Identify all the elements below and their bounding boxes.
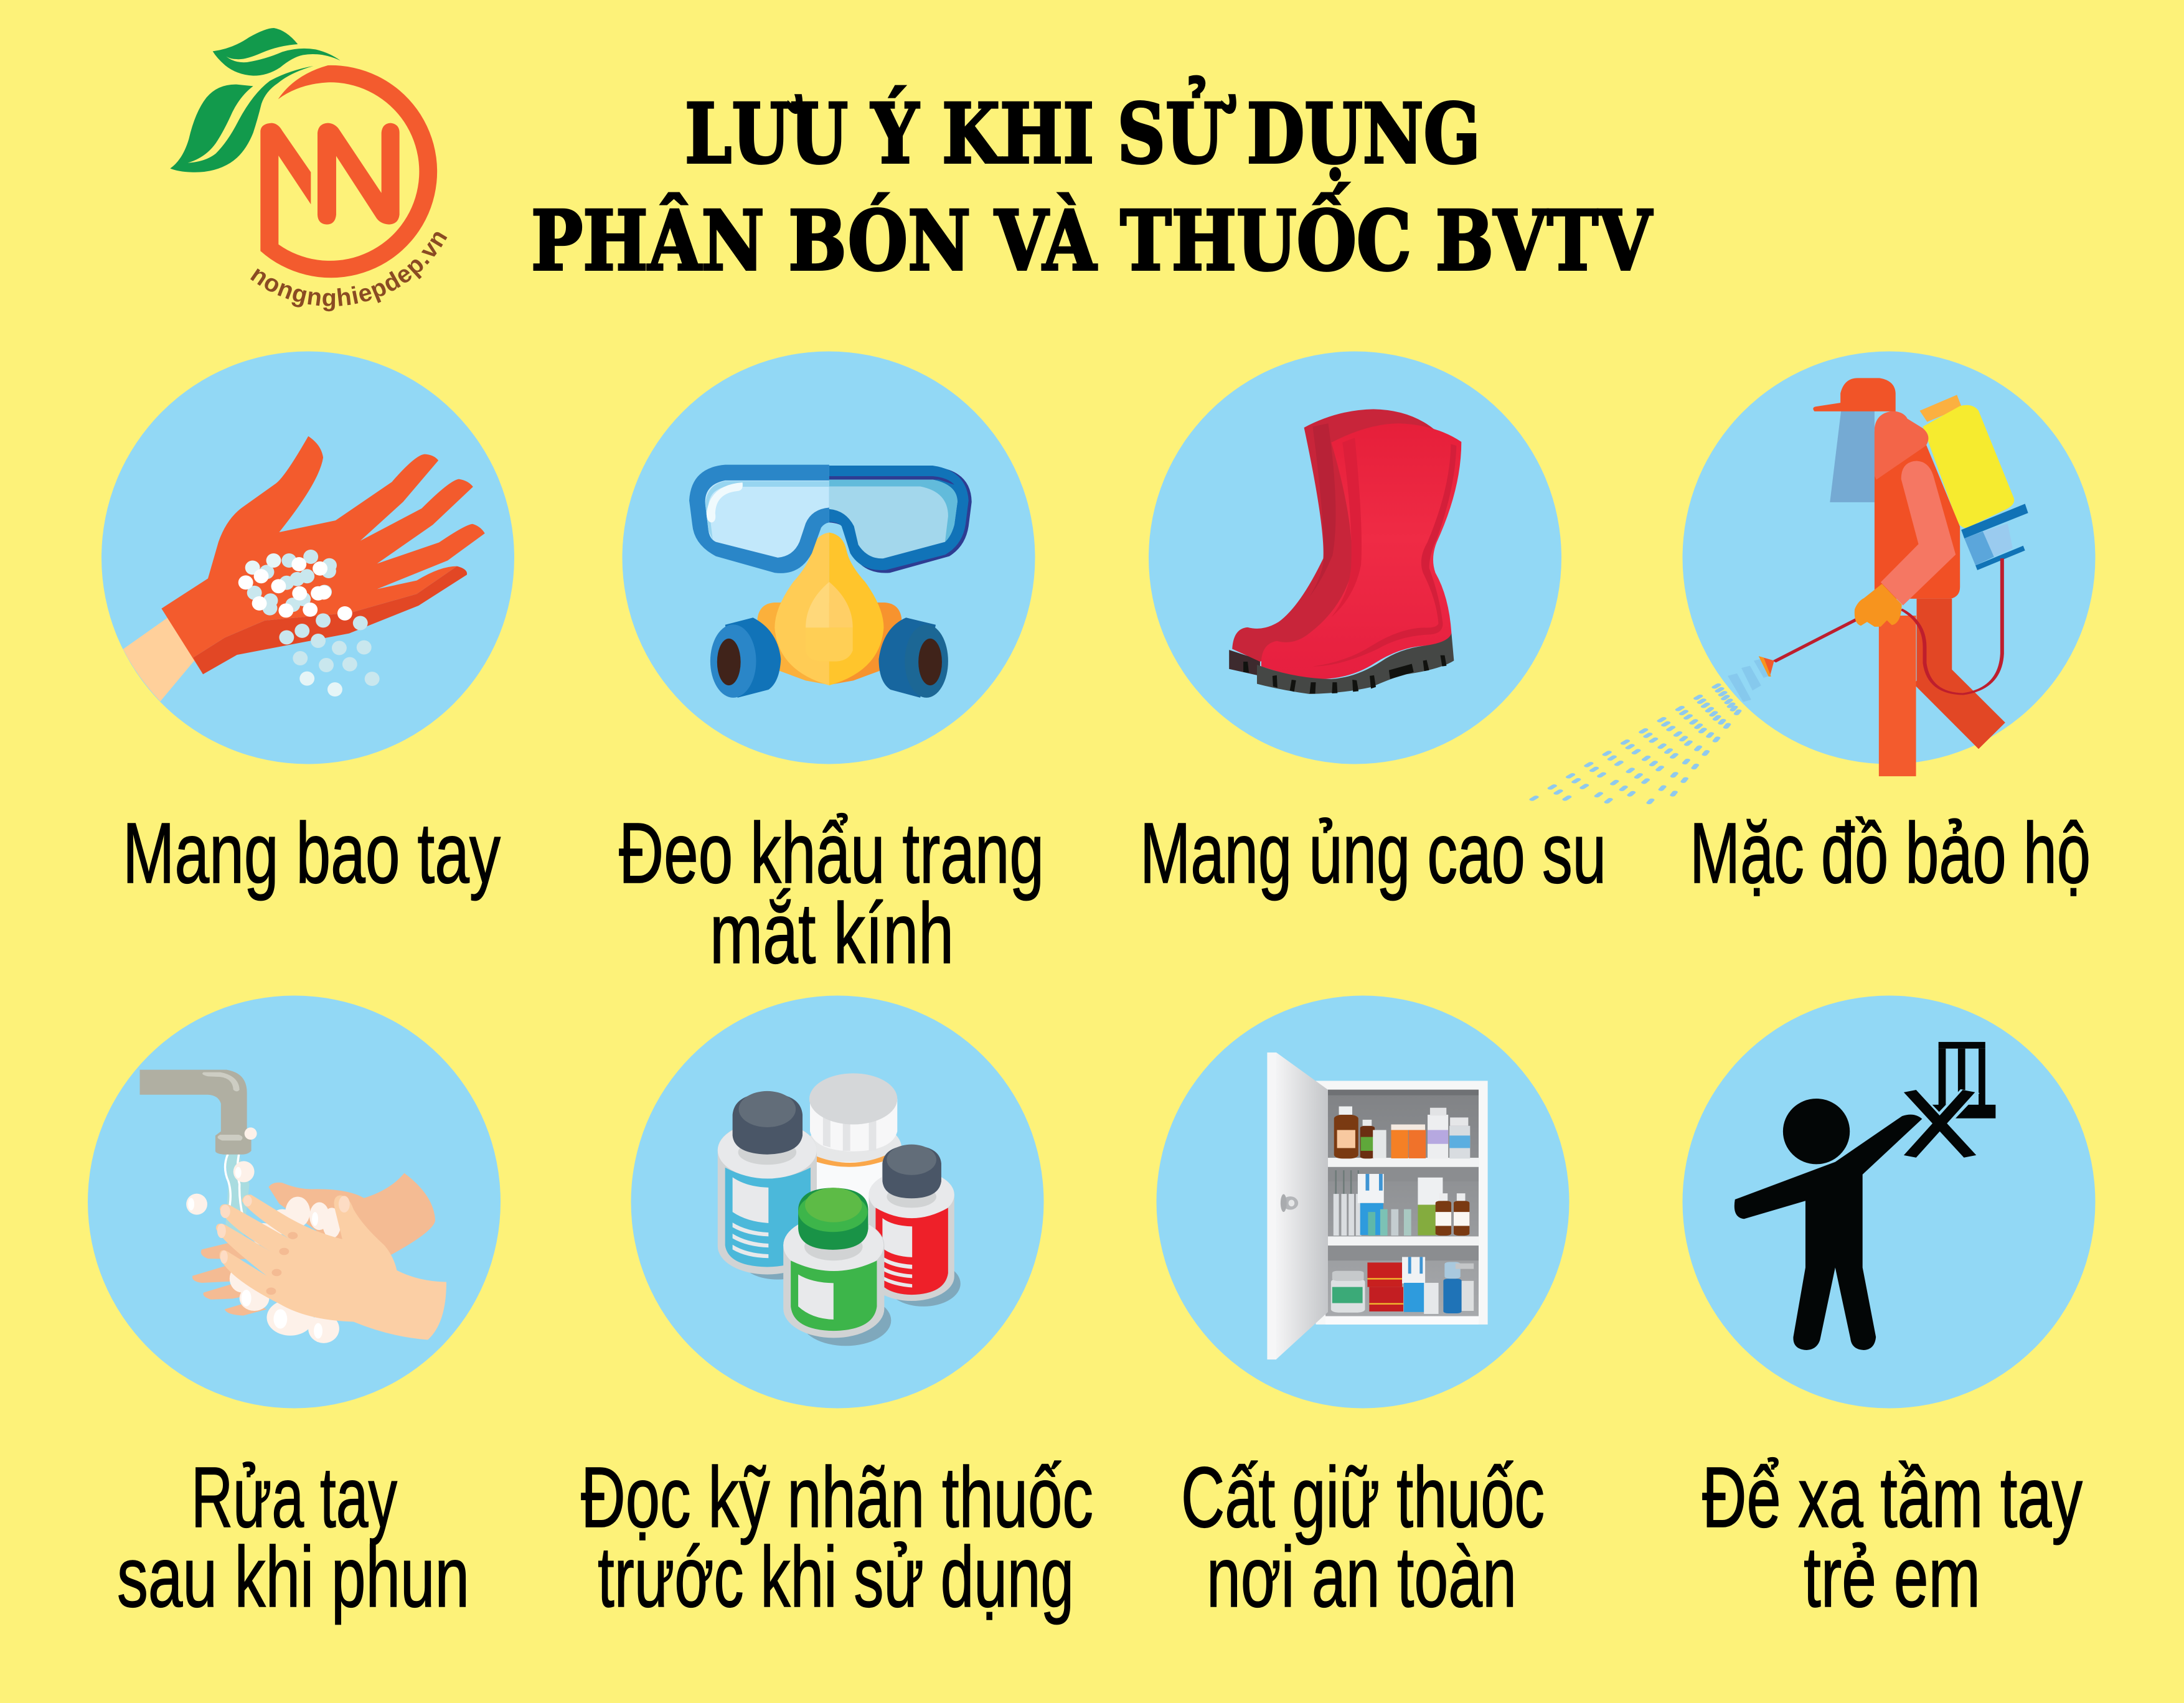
cabinet symbol (1931, 1042, 1995, 1119)
circle (1149, 351, 1561, 764)
circle (631, 996, 1043, 1408)
panel: protective clothing (1527, 351, 2096, 901)
circle (623, 351, 1035, 764)
label: trước khi sử dụng (598, 1529, 1074, 1625)
label: mắt kính (710, 886, 954, 982)
label (619, 805, 1044, 982)
panel: wash hands (88, 996, 501, 1625)
label: trẻ em (1804, 1529, 1980, 1625)
cross mark (1910, 1091, 1970, 1156)
panel: safe storage (1157, 996, 1569, 1625)
logo text: nongnghiepdep.vn (250, 232, 447, 311)
panel: read labels (581, 996, 1093, 1625)
child figure (1734, 1099, 1922, 1350)
label (581, 1450, 1093, 1625)
label: sau khi phun (117, 1529, 469, 1625)
red bottle (869, 1145, 954, 1301)
icon: washing hands under tap (140, 1070, 446, 1343)
icon: sprayer worker (1527, 378, 2028, 804)
icon: glove hand with granules (123, 436, 485, 701)
panel: boots (1140, 351, 1606, 901)
panel: gloves (101, 351, 514, 901)
title: PHÂN BÓN VÀ THUỐC BVTV (531, 182, 1653, 289)
title (531, 75, 1653, 289)
label: nơi an toàn (1207, 1529, 1517, 1625)
icon: rubber boot (1229, 409, 1461, 694)
label: Mang bao tay (123, 805, 501, 901)
panel: keep away from children (1682, 996, 2096, 1625)
logo (170, 28, 447, 311)
icon: respirator and goggles (689, 465, 972, 698)
label: Mang ủng cao su (1140, 805, 1606, 901)
label: Rửa tay (191, 1450, 397, 1546)
shelf 2 items (1334, 1170, 1469, 1236)
logo NN ring (260, 65, 437, 278)
white bottle (806, 1073, 901, 1265)
blue bottle (718, 1091, 817, 1275)
icon: child reaching for cabinet (1734, 1042, 1995, 1350)
title: LƯU Ý KHI SỬ DỤNG (685, 75, 1480, 182)
icon: pesticide bottles (718, 1073, 961, 1346)
panel: mask and goggles (619, 351, 1044, 982)
circle (1682, 996, 2096, 1408)
logo leaves (170, 28, 341, 172)
shelf 1 items (1334, 1106, 1470, 1158)
label: Cất giữ thuốc (1181, 1450, 1545, 1546)
label: Đọc kỹ nhãn thuốc (581, 1450, 1093, 1546)
icon: medicine cabinet (1267, 1053, 1488, 1359)
label (1181, 1450, 1545, 1625)
circle (101, 351, 514, 764)
label (117, 1450, 469, 1625)
shelf 3 items (1331, 1257, 1474, 1314)
label: Đeo khẩu trang (619, 805, 1044, 901)
spray mist (1527, 685, 1739, 804)
cabinet door (1267, 1053, 1328, 1359)
circle (88, 996, 501, 1408)
green bottle (783, 1188, 884, 1338)
label (1702, 1450, 2083, 1625)
circle (1157, 996, 1569, 1408)
circle (1682, 351, 2096, 764)
